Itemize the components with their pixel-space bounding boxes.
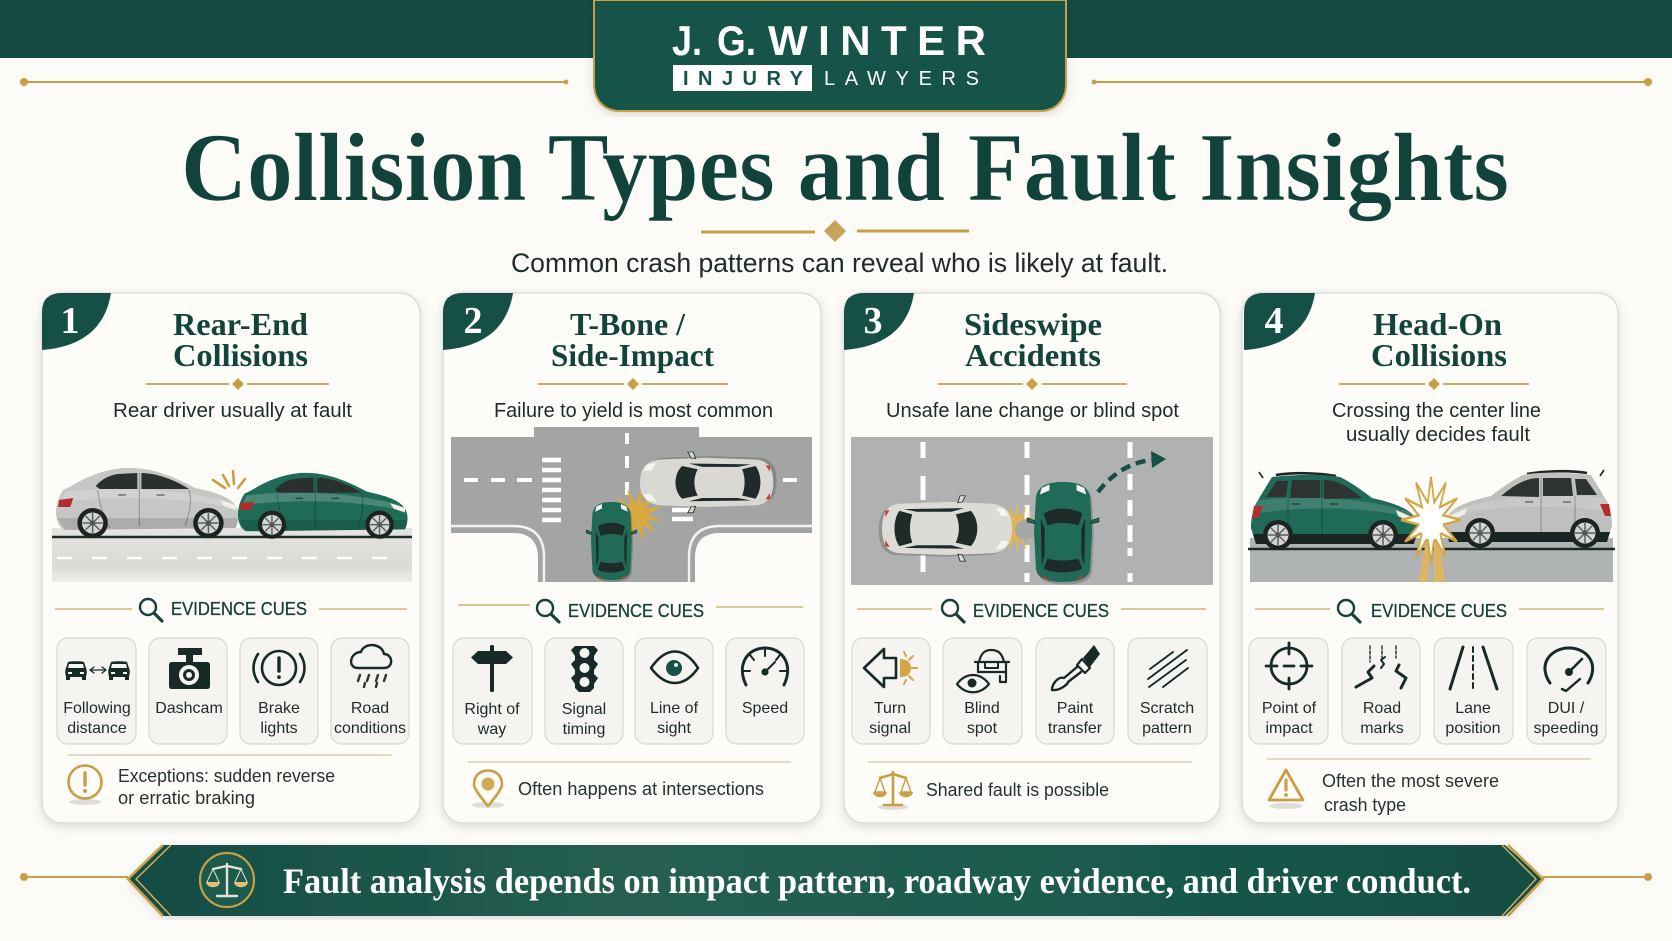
footer divider [468, 761, 791, 763]
cue tile: DUI / speeding [1527, 638, 1606, 744]
cue tile: paint transfer: transfer [1048, 720, 1103, 737]
icon: turn arrow [864, 649, 917, 687]
cue tile: turn signal: Turn [874, 700, 906, 717]
number badge 1 [42, 293, 111, 350]
tagline: Unsafe lane change or blind spot [886, 400, 1179, 422]
footer note: crash type [1324, 795, 1406, 815]
cue tile: scratch pattern: pattern [1142, 720, 1192, 737]
evidence cues heading: EVIDENCE CUES [973, 601, 1109, 621]
cue tile: line of sight: sight [657, 720, 691, 737]
logo injury word: INJURY [683, 68, 804, 90]
footer gold rule right [1543, 873, 1652, 881]
footer gold rule left [20, 873, 128, 881]
cue tile: DUI / speeding: speeding [1534, 720, 1598, 737]
cue tile: point of impact: Point of [1262, 700, 1316, 717]
title divider [701, 220, 969, 242]
icon: scales in circle [200, 853, 254, 907]
icon: brake warning [254, 651, 304, 685]
lane illustration [851, 437, 1213, 585]
card heading: Collisions [173, 337, 308, 373]
cue tile: dashcam [149, 638, 227, 744]
impact lines [213, 471, 245, 488]
footer note: Often happens at intersections [518, 779, 764, 799]
evidence cues heading: EVIDENCE CUES [1371, 601, 1507, 621]
intersection illustration [451, 427, 812, 582]
evidence cues heading: EVIDENCE CUES [171, 599, 307, 619]
silver SUV [1446, 470, 1612, 548]
tagline: Rear driver usually at fault [113, 400, 352, 422]
footer divider [1267, 758, 1591, 760]
banner message: Fault analysis depends on impact pattern, roadway evidence, and driver conduct. [283, 861, 1471, 901]
panel: t-bone side-impact [443, 293, 821, 823]
arrow: lane change [1098, 451, 1166, 492]
icon: rain cloud [351, 645, 391, 687]
green SUV [1251, 472, 1417, 550]
evidence cues heading: EVIDENCE CUES [568, 601, 704, 621]
road illustration with SUVs [1248, 470, 1615, 582]
road illustration with cars [52, 468, 412, 582]
icon: location pin [472, 770, 504, 808]
evidence cues heading [458, 600, 803, 622]
cue tile: line of sight [635, 638, 713, 744]
silver car [56, 468, 239, 538]
icon: warning triangle [1269, 770, 1303, 809]
tagline: Crossing the center line [1332, 400, 1541, 422]
header gold rule left [20, 78, 568, 86]
cue tile: road marks: marks [1360, 720, 1404, 737]
cue tile: road marks [1342, 638, 1420, 744]
evidence cues heading [55, 599, 407, 621]
card heading: Rear-End [173, 306, 308, 342]
card heading: Sideswipe [964, 306, 1102, 342]
number badge 4 [1244, 293, 1315, 350]
subtitle: Common crash patterns can reveal who is likely at fault. [511, 248, 1168, 278]
number badge 1: 1 [60, 300, 80, 342]
heading divider [538, 378, 728, 390]
evidence cues heading [857, 600, 1206, 622]
cue tile: lane position: position [1445, 720, 1501, 737]
logo wordmark: G. [717, 17, 756, 64]
card heading: Side-Impact [551, 337, 714, 373]
silver car top view [640, 452, 777, 513]
icon: scales of justice [873, 772, 913, 810]
number badge 3: 3 [864, 300, 882, 342]
cue tile: brake lights: lights [260, 720, 298, 737]
card heading: Collisions [1371, 337, 1507, 373]
evidence cues heading [1255, 600, 1604, 622]
cue tile: road conditions [331, 638, 409, 744]
cue tile: right of way: way [477, 721, 506, 738]
cue tile: speed [726, 638, 804, 744]
cue tile: paint transfer [1036, 638, 1114, 744]
cue tile: signal timing: timing [563, 721, 605, 738]
logo injury box [673, 65, 812, 91]
cue tile: brake lights [240, 638, 318, 744]
heading divider [146, 378, 329, 390]
tagline: usually decides fault [1346, 424, 1530, 446]
card heading: Accidents [965, 337, 1101, 373]
title: Collision Types and Fault Insights [181, 114, 1509, 222]
number badge 3 [844, 293, 914, 350]
cue tile: signal timing [545, 638, 623, 744]
icon: skid marks [1356, 646, 1406, 688]
icon: lane lines [1450, 647, 1497, 689]
cue tile: blind spot: Blind [964, 700, 1000, 717]
cue tile: point of impact [1249, 638, 1328, 744]
heading divider [938, 378, 1127, 390]
icon: eye [651, 652, 698, 683]
green car [238, 473, 408, 539]
cue tile: road marks: Road [1363, 700, 1401, 717]
icon: gauge with check [1545, 648, 1593, 691]
icon: paint brush [1052, 645, 1100, 690]
cue tile: following distance: Following [63, 700, 131, 717]
footer divider [868, 761, 1192, 763]
header band [0, 0, 1672, 58]
green car top view [1027, 482, 1099, 584]
icon: scratches [1148, 650, 1188, 687]
icon: crosshair [1266, 643, 1312, 689]
cue tile: scratch pattern: Scratch [1140, 700, 1194, 717]
green car top view [586, 502, 637, 582]
cue tile: turn signal [852, 638, 930, 744]
panel: head-on collisions [1242, 293, 1618, 823]
logo panel [594, 0, 1066, 111]
footer note: Shared fault is possible [926, 780, 1109, 800]
cue tile: blind spot [943, 638, 1022, 744]
icon: exclamation warning [68, 766, 102, 805]
number badge 4: 4 [1264, 300, 1284, 342]
panel: sideswipe accidents [844, 293, 1220, 823]
bottom banner [128, 845, 1543, 916]
tagline: Failure to yield is most common [494, 400, 773, 422]
cue tile: right of way [453, 638, 532, 744]
header gold rule right [1092, 78, 1652, 86]
icon: traffic light [571, 646, 598, 692]
cue tile: following distance: distance [67, 720, 127, 737]
number badge 2: 2 [464, 300, 482, 342]
cue tile: following distance [57, 638, 136, 744]
cue tile: line of sight: Line of [650, 700, 698, 717]
impact burst [603, 482, 669, 548]
logo lawyers word: LAWYERS [824, 68, 979, 90]
cue tile: brake lights: Brake [258, 700, 300, 717]
cue tile: lane position: Lane [1455, 700, 1491, 717]
icon: dashcam [169, 648, 210, 689]
cue tile: lane position [1434, 638, 1513, 744]
card heading: Head-On [1373, 306, 1502, 342]
footer divider [68, 754, 392, 756]
icon: two cars [65, 661, 130, 680]
logo wordmark: WINTER [768, 17, 986, 64]
icon: speedometer [742, 648, 788, 685]
cue tile: speed: Speed [742, 700, 788, 717]
cue tile: paint transfer: Paint [1057, 700, 1093, 717]
cue tile: DUI / speeding: DUI / [1548, 700, 1584, 717]
icon: car and eye [957, 650, 1009, 692]
icon: road sign [471, 645, 513, 692]
silver car top view [879, 496, 1012, 561]
cue tile: point of impact: impact [1265, 720, 1313, 737]
cue tile: blind spot: spot [967, 720, 998, 737]
card heading: T-Bone / [570, 306, 686, 342]
impact burst [1401, 477, 1461, 563]
cue tile: right of way: Right of [464, 701, 520, 718]
cue tile: scratch pattern [1128, 638, 1207, 744]
cue tile: signal timing: Signal [562, 701, 606, 718]
cue tile: turn signal: signal [869, 720, 911, 737]
cue tile: road conditions: conditions [334, 720, 406, 737]
number badge 2 [443, 293, 513, 350]
cue tile: dashcam: Dashcam [155, 700, 223, 717]
logo wordmark: J. [672, 17, 702, 64]
footer note: or erratic braking [118, 788, 255, 808]
footer note: Often the most severe [1322, 771, 1499, 791]
panel: rear-end collisions [42, 293, 420, 823]
footer note: Exceptions: sudden reverse [118, 766, 335, 786]
cue tile: road conditions: Road [351, 700, 389, 717]
heading divider [1339, 378, 1529, 390]
impact burst [998, 502, 1036, 554]
